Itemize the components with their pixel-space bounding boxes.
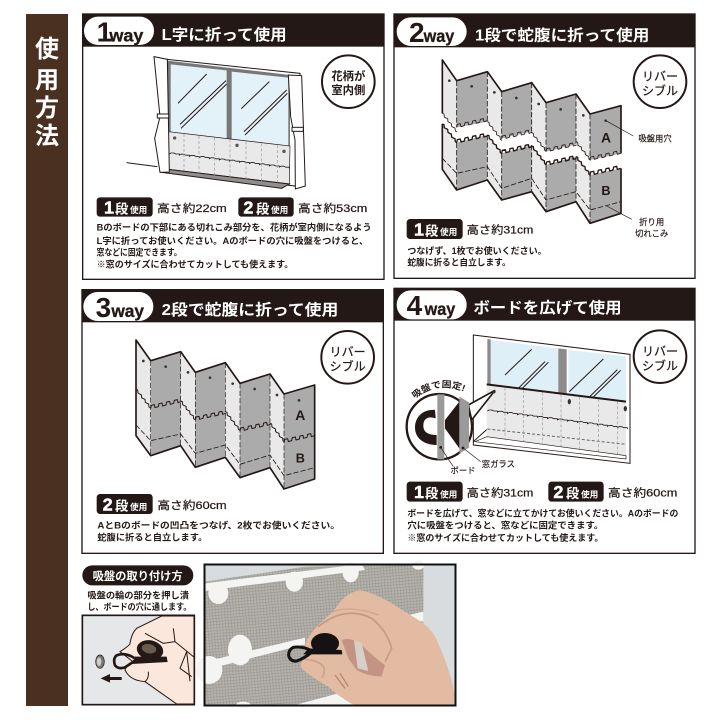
tag: 2段使用 高さ約60cm: 段 [115, 498, 129, 513]
sidebar: 使用方法: 法 [35, 123, 59, 150]
illustration: board A, zigzag [442, 60, 621, 160]
tag: 1段使用 高さ約22cm: 使用 [130, 204, 147, 215]
badge: リバーシブル: シブル [330, 359, 366, 374]
panel: 1way [83, 14, 384, 279]
tag: 1段使用 高さ約31cm: 1 [414, 219, 424, 239]
heading: 3way: 2段で蛇腹に折って使用 [162, 301, 338, 319]
text: description [407, 508, 678, 543]
text: description: AとBのボードの凹凸をつなげ、2枚でお使いください。 [97, 520, 340, 531]
tag: 1段使用 高さ約31cm: 段 [425, 486, 439, 501]
heading: 3way [82, 290, 383, 323]
tag: 1段使用 高さ約22cm [97, 197, 227, 217]
callout: 折り用切れこみ: 切れこみ [635, 229, 668, 239]
text: instruction: し、ボードの穴に通します。 [87, 601, 191, 612]
illustration: board B, zigzag: B [601, 184, 611, 198]
suction cup [289, 633, 342, 661]
tag: 2段使用 高さ約60cm [548, 482, 677, 502]
tag: 1段使用 高さ約31cm: 高さ約31cm [467, 223, 533, 237]
tag: 1段使用 高さ約31cm: 使用 [440, 489, 457, 500]
heading: 3way: 3 [96, 292, 111, 323]
callout: 吸盤用穴: 吸盤用穴 [638, 133, 672, 143]
heading: 4way: 4 [407, 290, 423, 321]
tag: 2段使用 高さ約53cm [238, 197, 367, 217]
text: description: 蛇腹に折ると自立します。 [407, 256, 511, 267]
heading: 2way: 1段で蛇腹に折って使用 [475, 26, 649, 44]
badge: リバーシブル: リバー [330, 345, 366, 359]
text: description [97, 520, 340, 542]
text: description [407, 245, 547, 267]
heading: 1way [83, 14, 384, 48]
illustration: joined boards A and B, zigzag [136, 340, 315, 489]
tag: 2段使用 高さ約60cm: 段 [566, 486, 580, 501]
tag: 1段使用 高さ約31cm: 段 [425, 223, 439, 238]
sidebar: 使用方法: 用 [35, 67, 59, 94]
callout: 折り用切れこみ [607, 206, 668, 239]
photo: attaching suction cup to board [196, 560, 456, 708]
text: description: つなげず、1枚でお使いください。 [407, 245, 547, 256]
tag: 2段使用 高さ約60cm: 2 [553, 482, 563, 502]
text: description: ※窓のサイズに合わせてカットしても使えます。 [407, 532, 603, 543]
badge: リバーシブル: リバー [642, 69, 678, 83]
tag: 1段使用 高さ約31cm [407, 482, 533, 502]
illustration: pressing suction cup through hole [82, 615, 194, 705]
illustration: window with unfolded board [473, 335, 630, 463]
text: instruction: 吸盤の輪の部分を押し潰 [87, 589, 189, 600]
text: description: 穴に吸盤をつけると、窓などに固定できます。 [407, 520, 603, 531]
tag: 1段使用 高さ約31cm [407, 219, 533, 239]
heading: 1way: L字に折って使用 [162, 26, 287, 44]
heading: 4way: ボードを広げて使用 [473, 299, 622, 317]
label: ボード: ボード [450, 466, 475, 476]
tag: 1段使用 高さ約31cm: 1 [414, 482, 424, 502]
tag: 1段使用 高さ約31cm: 使用 [440, 226, 457, 237]
text: description: L字に折ってお使いください。Aのボードの穴に吸盤をつけると、 [97, 235, 368, 246]
tag: 2段使用 高さ約60cm: 使用 [581, 489, 598, 500]
tag: 1段使用 高さ約31cm: 高さ約31cm [467, 485, 533, 499]
tag: 1段使用 高さ約22cm: 段 [115, 201, 129, 216]
text: description: 蛇腹に折ると自立します。 [97, 531, 207, 542]
tag: 2段使用 高さ約53cm: 使用 [271, 204, 288, 215]
text: description [97, 222, 372, 270]
illustration: board A, zigzag: A [601, 129, 611, 145]
callout: 吸盤用穴 [606, 121, 672, 143]
tag: 1段使用 高さ約22cm: 1 [104, 197, 114, 217]
badge: 花柄が室内側 [322, 55, 375, 108]
label: 窓ガラス: 窓ガラス [482, 459, 515, 469]
text: description: ボードを広げて、窓などに立てかけてお使いください。Aのボードの [407, 508, 678, 519]
hand [301, 590, 454, 706]
badge: リバーシブル: シブル [642, 83, 678, 98]
badge: リバーシブル [634, 330, 686, 383]
illustration: joined boards A and B, zigzag: B [296, 451, 305, 465]
heading: 2way: way [423, 26, 454, 46]
panel: 3way [82, 290, 383, 553]
badge: 花柄が室内側: 花柄が [331, 69, 366, 83]
section: 吸盤の取り付け方 [82, 565, 194, 705]
tag: 2段使用 高さ約60cm: 高さ約60cm [157, 498, 227, 512]
badge: リバーシブル: シブル [642, 358, 678, 373]
board [205, 565, 423, 705]
heading: 2way: 2 [409, 17, 425, 48]
text: instruction [87, 589, 191, 612]
badge: 花柄が室内側: 室内側 [331, 83, 365, 97]
panel: 4way [393, 288, 696, 554]
tag: 2段使用 高さ約53cm: 高さ約53cm [298, 201, 367, 215]
callout: 折り用切れこみ: 折り用 [639, 217, 664, 227]
text: description: Bのボードの下部にある切れこみ部分を、花柄が室内側になるよう [97, 222, 372, 233]
sidebar: 使用方法: 使 [35, 36, 59, 63]
tag: 2段使用 高さ約60cm: 使用 [130, 501, 147, 512]
tag: 2段使用 高さ約60cm: 高さ約60cm [608, 485, 677, 499]
panel: 2way [394, 14, 695, 278]
heading: 4way [394, 288, 695, 321]
sidebar: 使用方法 [26, 14, 68, 706]
text: description: 窓などに固定できます。 [97, 247, 182, 258]
detail: suction cup magnifier [407, 390, 496, 467]
badge: リバーシブル [321, 331, 374, 384]
badge: リバーシブル [634, 55, 686, 108]
illustration: joined boards A and B, zigzag: A [295, 407, 305, 423]
label: 吸盤で固定!: 吸盤で固定! [411, 380, 466, 398]
heading: 1way: 1 [97, 17, 112, 48]
heading: 2way [394, 14, 695, 48]
text: description: ※窓のサイズに合わせてカットしても使えます。 [97, 259, 293, 270]
badge: リバーシブル: リバー [642, 344, 678, 358]
tag: 2段使用 高さ約53cm: 段 [256, 201, 270, 216]
tag: 2段使用 高さ約60cm [97, 494, 227, 514]
illustration: board B, zigzag [442, 124, 621, 223]
tag: 2段使用 高さ約60cm: 2 [103, 494, 113, 514]
illustration: window with L-folded board [127, 57, 305, 189]
tag: 1段使用 高さ約22cm: 高さ約22cm [157, 201, 227, 215]
heading: 3way: way [110, 301, 144, 321]
tag: 2段使用 高さ約53cm: 2 [243, 197, 253, 217]
heading pill: 吸盤の取り付け方 [93, 569, 183, 583]
heading: 1way: way [108, 26, 143, 46]
sidebar: 使用方法: 方 [35, 95, 59, 122]
heading: 4way: way [424, 299, 455, 319]
